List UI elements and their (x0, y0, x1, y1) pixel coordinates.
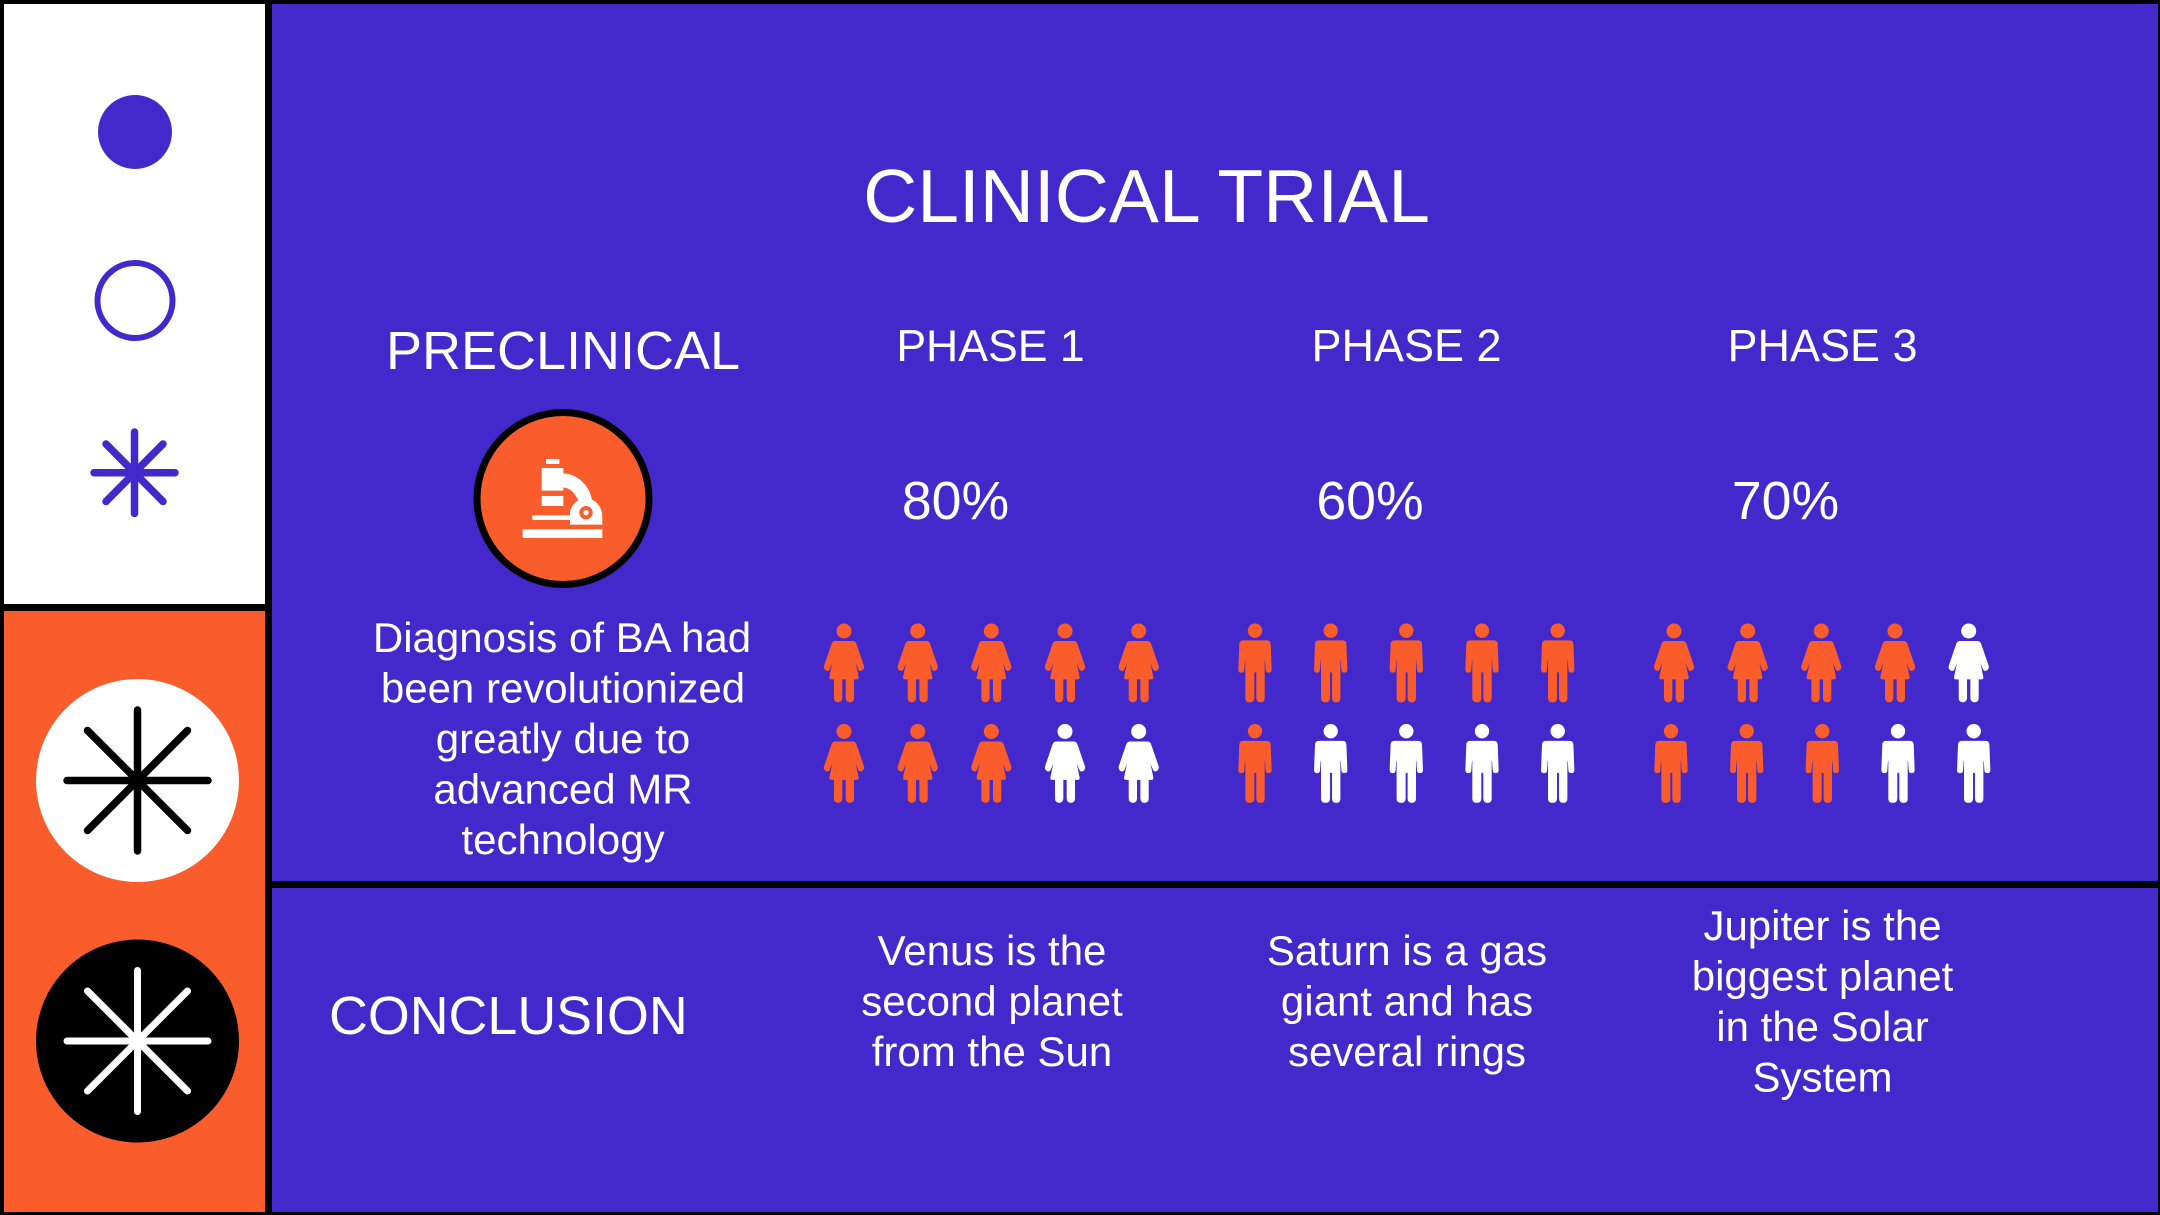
text: saturn: Saturn is a gas (1267, 927, 1547, 974)
panel: orange symbols (4, 611, 265, 1212)
text: saturn: giant and has (1281, 978, 1533, 1024)
text: jupiter: System (1752, 1054, 1893, 1100)
icon: blue asterisk (94, 432, 175, 514)
text: preclinical description: Diagnosis of BA had (373, 614, 751, 661)
text: venus (861, 927, 1123, 1075)
panel: clinical trial phases (272, 4, 2158, 881)
text: venus: from the Sun (872, 1028, 1112, 1075)
text: saturn: several rings (1288, 1028, 1526, 1075)
text: jupiter (1692, 902, 1954, 1100)
heading: conclusion: CONCLUSION (329, 986, 688, 1046)
pictogram: phase 2 people (1239, 623, 1574, 802)
title: CLINICAL TRIAL (863, 154, 1430, 238)
icon: white circle asterisk (36, 679, 239, 882)
heading: preclinical: PRECLINICAL (386, 321, 740, 381)
text: jupiter: biggest planet (1692, 952, 1954, 1000)
text: preclinical description: been revolutionized (381, 664, 745, 712)
heading: phase 1: PHASE 1 (896, 322, 1085, 371)
icon: microscope (477, 412, 649, 584)
heading: phase 3: PHASE 3 (1727, 320, 1918, 371)
text: preclinical description (373, 614, 751, 863)
text: jupiter: Jupiter is the (1703, 902, 1942, 949)
text: jupiter: in the Solar (1716, 1003, 1929, 1050)
panel: legend symbols (4, 4, 265, 604)
text: preclinical description: advanced MR (433, 766, 693, 812)
text: preclinical description: greatly due to (436, 715, 690, 762)
panel: conclusion (272, 888, 2158, 1212)
value: phase 3 percent: 70% (1732, 471, 1839, 531)
pictogram: phase 3 people (1654, 623, 1990, 802)
value: phase 1 percent: 80% (902, 471, 1009, 531)
icon: black circle asterisk (36, 940, 239, 1142)
pictogram: phase 1 people (824, 623, 1158, 802)
text: preclinical description: technology (461, 816, 665, 863)
value: phase 2 percent: 60% (1316, 471, 1424, 531)
text: venus: second planet (861, 978, 1123, 1024)
text: saturn (1267, 927, 1547, 1075)
heading: phase 2: PHASE 2 (1311, 320, 1502, 371)
text: venus: Venus is the (878, 927, 1106, 974)
icon: ring (98, 263, 172, 338)
icon: filled circle (98, 95, 172, 169)
